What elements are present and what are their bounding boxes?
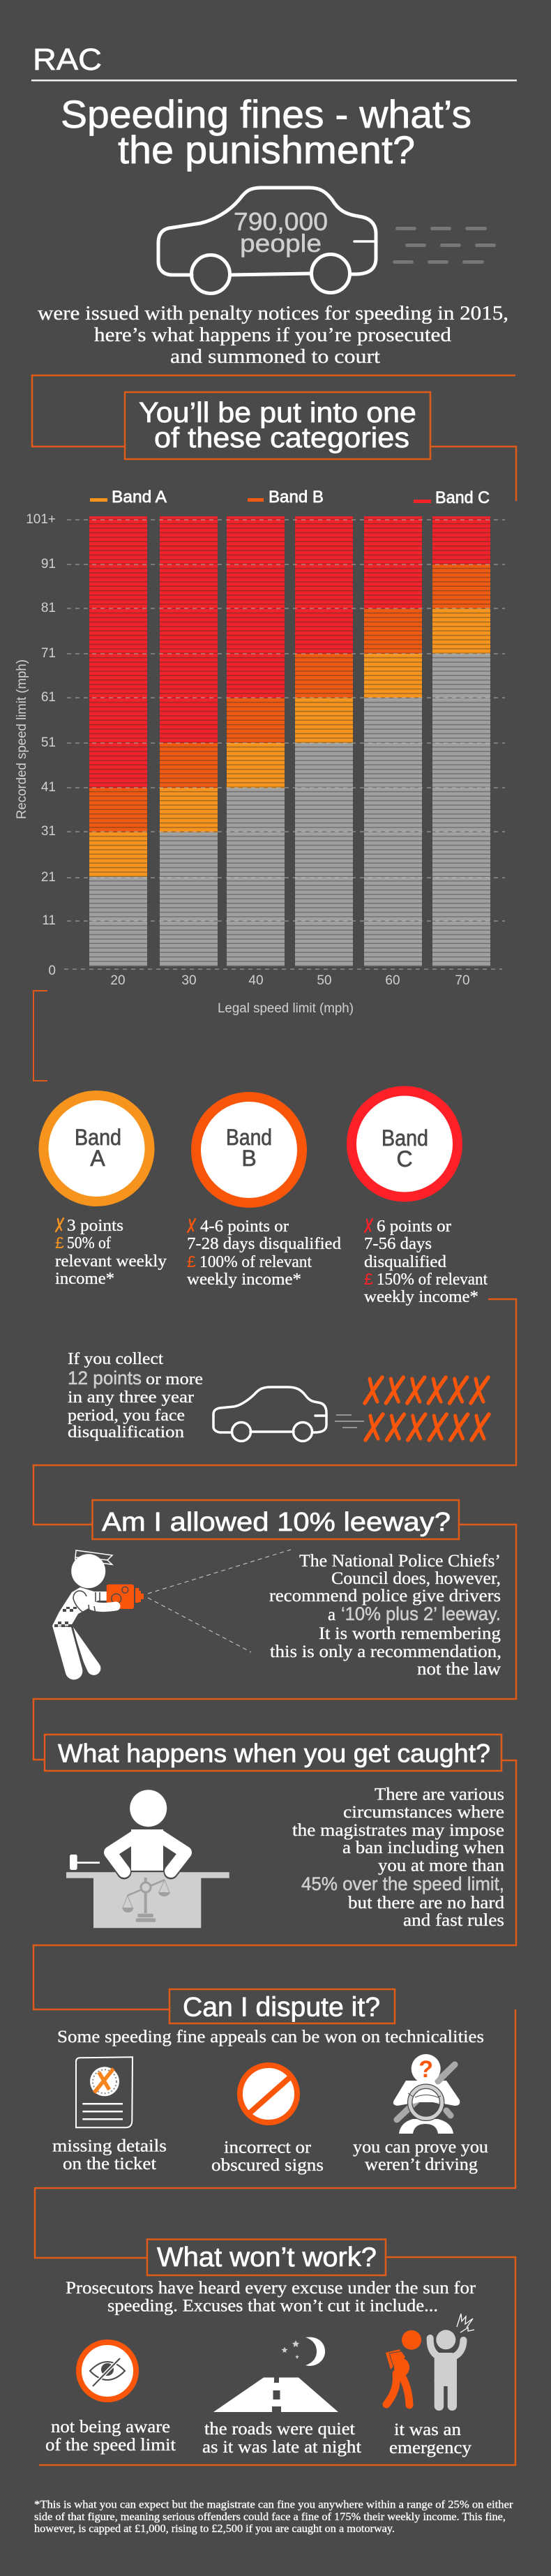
badge: Band A: Band [75,1125,121,1150]
text: Band A penalties: £ [55,1234,64,1252]
column 50 [295,516,353,966]
x axis labels: 60 [385,973,400,988]
text: 10% plus 2 leeway: a [328,1605,335,1624]
intro text: here’s what happens if you’re prosecuted [94,324,451,346]
text: Band B penalties: weekly income* [187,1271,301,1289]
legend: Band B [269,488,324,507]
x axis labels: 20 [110,973,126,988]
caption: missing details: on the ticket [63,2155,156,2173]
section frame and heading: caught: What happens when you get caught? [58,1739,490,1768]
x axis labels: 70 [455,973,470,988]
section frame and heading: caught [33,1525,516,1771]
x axis labels: 50 [317,973,332,988]
text: excuses intro: Prosecutors have heard every excuse under the sun for [66,2279,476,2298]
intro text: and summoned to court [170,346,380,368]
text: excuses intro: speeding. Excuses that won’t cut it include... [107,2297,438,2315]
caption: emergency [389,2420,472,2457]
caption: missing details [52,2136,167,2173]
text: magistrates ban: you at more than [378,1856,505,1875]
section frame and heading: what won't work: What won’t work? [157,2242,377,2272]
section frame and heading: what won't work [35,2009,515,2465]
y axis title: Recorded speed limit (mph) [15,659,29,819]
text: Band B penalties: 100% of relevant [199,1253,312,1271]
text: Band B penalties: £ [187,1252,196,1271]
text: magistrates ban: but there are no hard [348,1894,505,1912]
text: 10% plus 2 leeway: Council does, however, [331,1569,501,1588]
intro text [38,303,508,368]
text: magistrates ban [292,1785,505,1930]
text: Band C penalties: disqualified [364,1253,446,1271]
icon: road [213,2377,338,2412]
text: 10% plus 2 leeway [269,1552,501,1679]
caption: emergency: it was an [394,2420,462,2439]
text: 12 points disqualification: in any three year [68,1388,194,1407]
y axis labels: 81 [41,601,56,615]
y axis labels: 101+ [26,512,56,527]
section frame and heading: leeway: Am I allowed 10% leeway? [102,1508,451,1537]
caption: obscured signs [211,2138,324,2175]
icon: twelve penalty crosses [365,1377,489,1440]
column 30 [160,516,218,966]
intro text: were issued with penalty notices for speeding in 2015, [38,303,508,324]
text: magistrates ban: a ban including when [342,1839,505,1857]
text: magistrates ban: 45% over the speed limit, [301,1873,504,1894]
caption: emergency: emergency [389,2439,472,2457]
column 60 [364,516,422,966]
text: magistrates ban: and fast rules [403,1911,504,1930]
corner bracket [33,991,47,1081]
footnote [34,2499,513,2535]
section frame and heading: dispute [33,1760,516,2023]
text: Band B penalties: 7-28 days disqualified [187,1235,341,1253]
icon: police officer with speed camera [52,1550,144,1679]
title [61,92,471,172]
legend [90,488,490,507]
icon: angry person hitting another [384,2314,474,2411]
text: 10% plus 2 leeway: this is only a recommendation, [270,1642,501,1661]
x axis labels: 30 [181,973,197,988]
logo: RAC: RAC [33,43,102,77]
caption: not driving: weren’t driving [365,2155,478,2174]
text: technicalities intro: Some speeding fine appeals can be won on technicalities [57,2028,484,2046]
icon: driver with question mark: ? [418,2056,433,2083]
caption: not driving [353,2138,489,2174]
badge: Band B: B [241,1146,257,1171]
caption: speed limit: not being aware [51,2418,170,2436]
footnote: *This is what you can expect but the magistrate can fine you anywhere within a range of 25% on either [34,2499,513,2510]
x axis labels [110,973,470,988]
text: Band C penalties [364,1218,488,1306]
text: Band A penalties: relevant weekly [55,1252,167,1271]
icon: driver with question mark [393,2054,460,2134]
car illustration with 790,000 people: people [240,229,322,257]
y axis labels: 71 [41,646,56,661]
text: Band A penalties: 3 points [67,1217,123,1235]
badge: Band C: Band [382,1125,428,1151]
column 20 [89,516,147,966]
car illustration with 790,000 people [158,188,376,293]
caption: missing details: missing details [52,2136,167,2156]
text: 12 points disqualification [68,1350,203,1441]
text: 10% plus 2 leeway: The National Police Chiefs’ [299,1552,501,1571]
camera beam [148,1550,291,1652]
y axis labels [26,512,56,978]
caption: speed limit: of the speed limit [45,2436,176,2455]
speed dashes [393,227,496,264]
footnote: however, is capped at £1,000, rising to £2,500 if you are caught on a motorway. [34,2523,395,2535]
icon: magistrate at desk with gavel and scales [66,1790,229,1928]
badge: Band C: C [396,1146,413,1171]
caption: not driving: you can prove you [353,2138,489,2157]
text: 10% plus 2 leeway: recommend police give drivers [269,1587,501,1605]
title: the punishment? [118,128,415,172]
badge: Band B [196,1097,302,1203]
y axis labels: 41 [41,780,56,795]
icon: ticket [76,2057,133,2127]
y axis labels: 31 [41,824,56,839]
section frame and heading: categories [32,375,516,501]
y axis labels: 61 [41,690,56,705]
text: 12 points disqualification: disqualification [68,1423,184,1441]
text: Band B penalties: 4-6 points or [200,1218,289,1236]
y axis labels: 0 [48,964,56,978]
caption: obscured signs: incorrect or [224,2138,312,2157]
icon: crossed-out eye [79,2342,136,2399]
section frame and heading: dispute: Can I dispute it? [183,1993,380,2022]
y axis labels: 21 [41,870,56,885]
icon: small car [213,1387,364,1441]
text: Band A penalties: income* [55,1270,114,1288]
caption: speed limit [45,2418,176,2455]
column 70 [432,516,490,966]
legend: Band A [112,488,167,507]
stacked bar chart: speed bands [15,512,505,1016]
text: Band A penalties [55,1217,167,1288]
x axis title: Legal speed limit (mph) [218,1001,354,1016]
y axis labels: 51 [41,735,56,750]
column 40 [227,516,285,966]
y axis labels: 91 [41,557,56,571]
badge: Band A [43,1095,149,1201]
caption: quiet roads [202,2420,361,2457]
text: magistrates ban: There are various [375,1785,504,1804]
text: Band C penalties: 150% of relevant [377,1271,488,1289]
text: magistrates ban: the magistrates may impose [292,1821,504,1840]
text: 10% plus 2 leeway: It is worth remembering [319,1624,501,1643]
text: Band B penalties [187,1218,341,1289]
text: 10% plus 2 leeway: ‘10% plus 2’ leeway. [341,1603,501,1624]
x axis labels: 40 [248,973,264,988]
caption: quiet roads: the roads were quiet [204,2420,355,2439]
icon: no-entry sign [240,2065,297,2122]
text: magistrates ban: circumstances where [343,1803,504,1822]
caption: quiet roads: as it was late at night [202,2438,361,2457]
text: 12 points disqualification: 12 points [68,1368,142,1388]
icon: moon and stars [282,2337,325,2366]
text: Band C penalties: £ [364,1270,373,1288]
text: Band C penalties: 6 points or [377,1218,451,1236]
text: excuses intro [66,2279,476,2315]
section frame and heading: categories: of these categories [154,421,409,454]
caption: obscured signs: obscured signs [211,2156,324,2175]
text: Band C penalties: weekly income* [364,1288,478,1306]
footnote: side of that figure, meaning serious offenders could face a fine of 175% their weekly income. This fine, [34,2511,506,2523]
title: Speeding fines - what’s [61,92,471,136]
text: Band C penalties: 7-56 days [364,1235,432,1253]
badge: Band C [352,1091,458,1197]
text: 12 points disqualification: period, you face [68,1407,185,1425]
car illustration with 790,000 people: 790,000 [234,207,328,236]
text: Band A penalties: 50% of [67,1234,111,1252]
section frame and heading: leeway [33,1299,516,1539]
text: 10% plus 2 leeway: not the law [417,1660,501,1679]
text: 12 points disqualification: If you collect [68,1350,163,1368]
section frame and heading: categories: You’ll be put into one [139,396,416,428]
badge: Band A: A [90,1146,105,1171]
y axis labels: 11 [42,913,56,928]
text: 12 points disqualification: or more [146,1370,203,1388]
legend: Band C [435,488,490,507]
badge: Band B: Band [226,1125,272,1150]
